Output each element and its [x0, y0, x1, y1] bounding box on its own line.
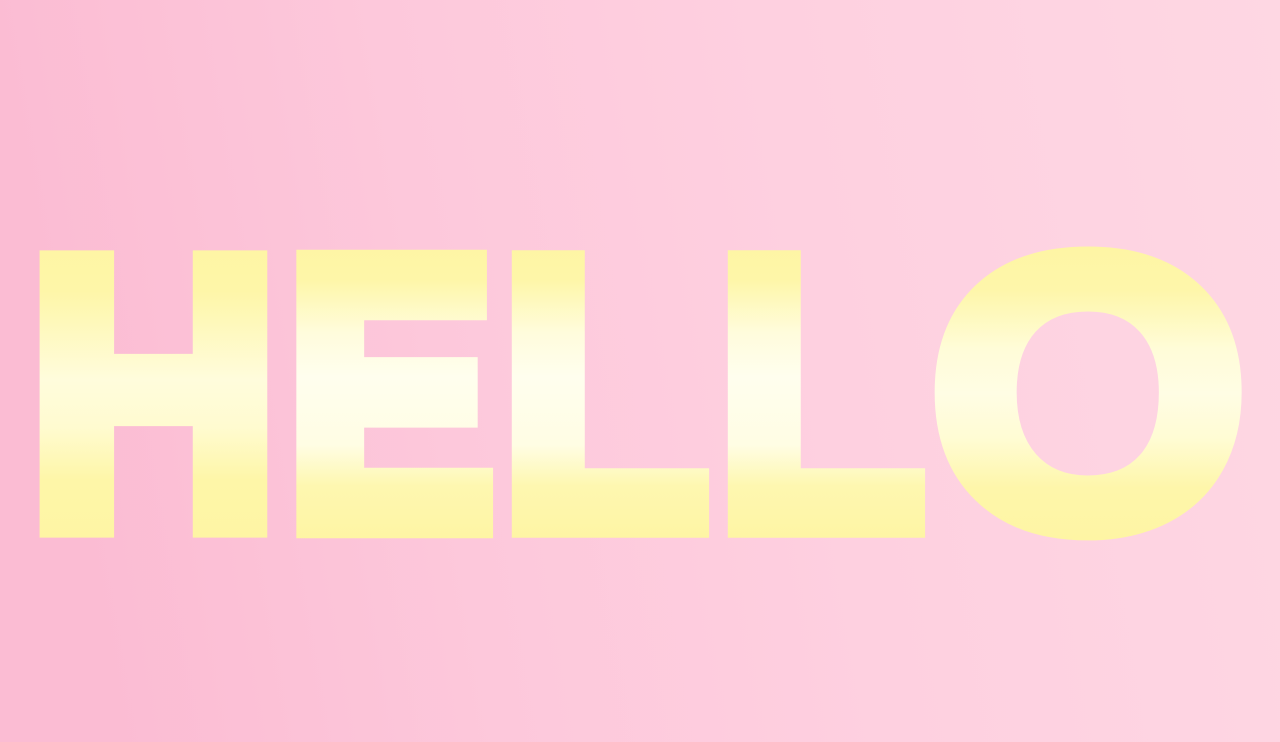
letter L: L: [502, 182, 707, 604]
letter E: E: [287, 182, 494, 605]
letter L: L: [718, 182, 923, 604]
letter O: O: [929, 178, 1248, 608]
letter H: H: [29, 181, 278, 604]
title: HELLO: [29, 178, 1248, 608]
